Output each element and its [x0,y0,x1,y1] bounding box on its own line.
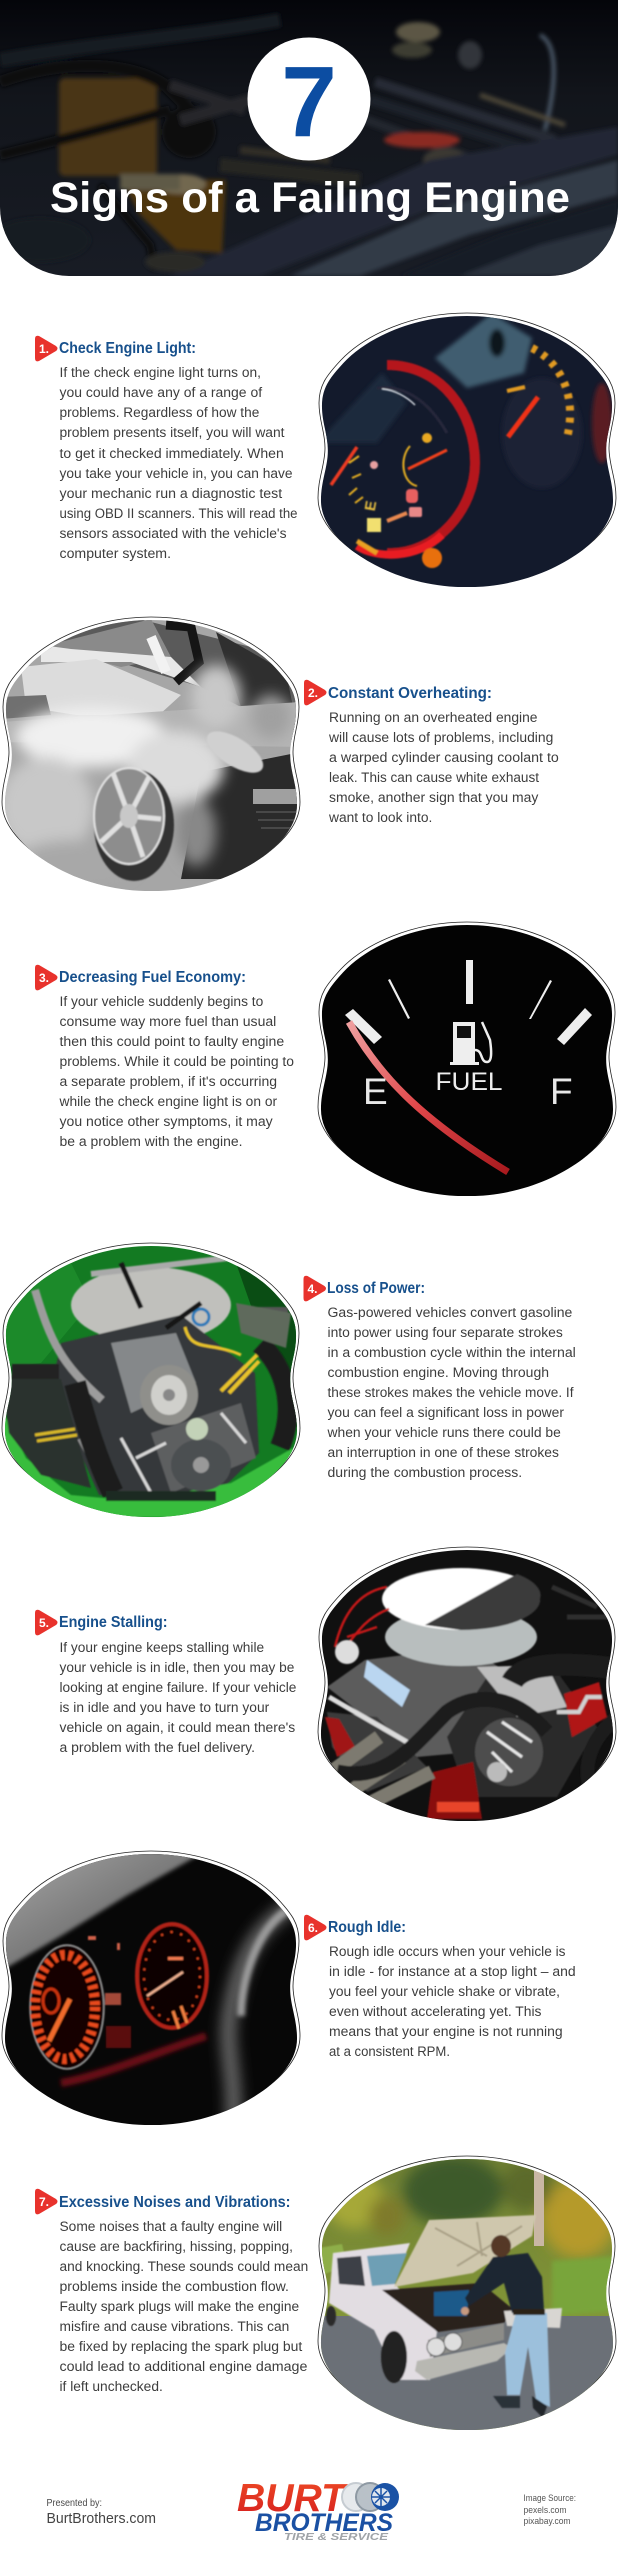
body text 3: a separate problem, if it's occurring [60,1074,277,1089]
body text 3: consume way more fuel than usual [60,1014,276,1029]
body text 4: combustion engine. Moving through [328,1365,549,1380]
title: Signs of a Failing Engine [50,174,570,222]
heading 4: Loss of Power: [327,1280,425,1297]
badge 7: 7. [39,2195,49,2209]
body text 1: you could have any of a range of [60,385,262,400]
body text 4: Gas-powered vehicles convert gasoline [328,1305,572,1320]
photo: fuel gauge: FUEL [436,1068,503,1096]
section 1: check engine light [35,313,618,587]
badge 3: 3. [39,971,49,985]
photo: dashboard gauge cluster: E [362,500,380,512]
body text 4 [326,1305,576,1480]
badge 7 [35,2189,58,2214]
body text 1: your mechanic run a diagnostic test [60,486,282,501]
body text 1: to get it checked immediately. When [60,446,284,461]
body text 2: leak. This can cause white exhaust [329,770,539,785]
body text 4: in a combustion cycle within the internal [328,1345,576,1360]
body text 1: computer system. [60,546,171,561]
photo: dashboard gauge cluster [317,313,618,587]
section 2: constant overheating [0,617,559,891]
body text 5: a problem with the fuel delivery. [60,1740,255,1755]
body text 1: you take your vehicle in, you can have [60,466,292,481]
number badge circle: 7 [281,46,337,158]
heading 1: Check Engine Light: [59,340,196,357]
body text 2: will cause lots of problems, including [328,730,553,745]
body text 4: you can feel a significant loss in power [328,1405,565,1420]
image source: pixabay.com [524,2516,571,2527]
body text 3: then this could point to faulty engine [60,1034,284,1049]
icon: fuel pump [450,1022,491,1065]
badge 6: 6. [308,1921,318,1935]
body text 3: while the check engine light is on or [58,1094,278,1109]
body text 5: looking at engine failure. If your vehicle [60,1680,296,1695]
body text 7: Some noises that a faulty engine will [60,2219,282,2234]
photo: man inspecting old car engine [317,2156,618,2430]
photo: green car engine [1,1243,303,1517]
logo: Burt Brothers [237,2477,399,2543]
photo: fuel gauge [317,922,618,1196]
body text 3: you notice other symptoms, it may [60,1114,273,1129]
body text 6: Rough idle occurs when your vehicle is [329,1944,566,1959]
badge 1: 1. [39,342,49,356]
section 5: engine stalling [35,1547,618,1821]
badge 1 [35,336,58,361]
badge 2 [304,680,326,705]
body text 4: an interruption in one of these strokes [328,1445,559,1460]
image source: Image Source: [524,2493,576,2504]
photo: red instrument panel [1,1851,303,2125]
presented by: Presented by: [46,2497,102,2509]
heading 2: Constant Overheating: [328,685,492,702]
header background: engine bay photo [0,0,618,276]
body text 2 [328,710,559,825]
section 7: excessive noises and vibrations [35,2156,618,2430]
badge 5: 5. [39,1616,49,1630]
body text 7 [60,2219,308,2394]
photo: car in smoke [0,617,303,891]
body text 2: want to look into. [328,810,432,825]
heading 6: Rough Idle: [328,1919,406,1936]
heading 3: Decreasing Fuel Economy: [59,969,246,986]
photo: fuel gauge: F [550,1071,573,1112]
icon: tires [342,2483,399,2511]
logo: Burt Brothers: TIRE & SERVICE [284,2532,388,2543]
presented by: BurtBrothers.com [46,2510,156,2527]
section 3: decreasing fuel economy [35,922,618,1196]
body text 3 [58,994,294,1149]
body text 2: Running on an overheated engine [329,710,538,725]
body text 1: If the check engine light turns on, [60,365,261,380]
badge 4 [304,1276,326,1301]
body text 1: problems. Regardless of how the [60,405,259,420]
badge 2: 2. [308,686,318,700]
footer [46,2477,576,2543]
body text 6: even without accelerating yet. This [329,2004,542,2019]
body text 6: means that your engine is not running [329,2024,563,2039]
body text 7: if left unchecked. [60,2379,163,2394]
body text 7: problems inside the combustion flow. [60,2279,289,2294]
body text 1 [60,365,298,561]
badge 4: 4. [308,1282,318,1296]
body text 5 [60,1640,296,1755]
body text 5: If your engine keeps stalling while [60,1640,264,1655]
body text 2: smoke, another sign that you may [329,790,539,805]
header panel [0,0,618,276]
heading 5: Engine Stalling: [59,1614,168,1631]
logo: Burt Brothers: BURT [237,2477,348,2520]
body text 4: during the combustion process. [328,1465,522,1480]
section 6: rough idle [1,1851,576,2125]
body text 3: problems. While it could be pointing to [60,1054,294,1069]
image source [524,2493,576,2527]
body text 6: you feel your vehicle shake or vibrate, [329,1984,560,1999]
section 4: loss of power [1,1243,576,1517]
body text 7: could lead to additional engine damage [60,2359,307,2374]
heading 7: Excessive Noises and Vibrations: [59,2194,290,2211]
badge 6 [304,1915,326,1940]
body text 4: these strokes makes the vehicle move. If [328,1385,574,1400]
photo: chrome V8 engine [317,1547,618,1821]
body text 4: when your vehicle runs there could be [326,1425,561,1440]
body text 7: misfire and cause vibrations. This can [60,2319,289,2334]
body text 5: vehicle on again, it could mean there's [60,1720,295,1735]
body text 3: If your vehicle suddenly begins to [60,994,263,1009]
body text 6 [329,1944,576,2059]
body text 7: and knocking. These sounds could mean [60,2259,308,2274]
body text 6: in idle - for instance at a stop light – and [329,1964,576,1979]
badge 5 [35,1610,58,1635]
body text 4: into power using four separate strokes [328,1325,563,1340]
body text 7: Faulty spark plugs will make the engine [60,2299,299,2314]
body text 1: using OBD II scanners. This will read the [60,506,298,521]
number badge circle [248,38,370,160]
logo: Burt Brothers: BROTHERS [255,2509,393,2537]
presented by [46,2497,156,2527]
photo: fuel gauge: E [363,1071,388,1112]
body text 7: cause are backfiring, hissing, popping, [60,2239,293,2254]
body text 2: a warped cylinder causing coolant to [329,750,559,765]
body text 1: sensors associated with the vehicle's [60,526,287,541]
body text 3: be a problem with the engine. [60,1134,242,1149]
body text 6: at a consistent RPM. [329,2044,450,2059]
badge 3 [35,965,58,990]
body text 7: be fixed by replacing the spark plug but [60,2339,303,2354]
body text 5: is in idle and you have to turn your [60,1700,270,1715]
body text 1: problem presents itself, you will want [60,425,285,440]
image source: pexels.com [524,2505,567,2516]
body text 5: your vehicle is in idle, then you may be [60,1660,294,1675]
